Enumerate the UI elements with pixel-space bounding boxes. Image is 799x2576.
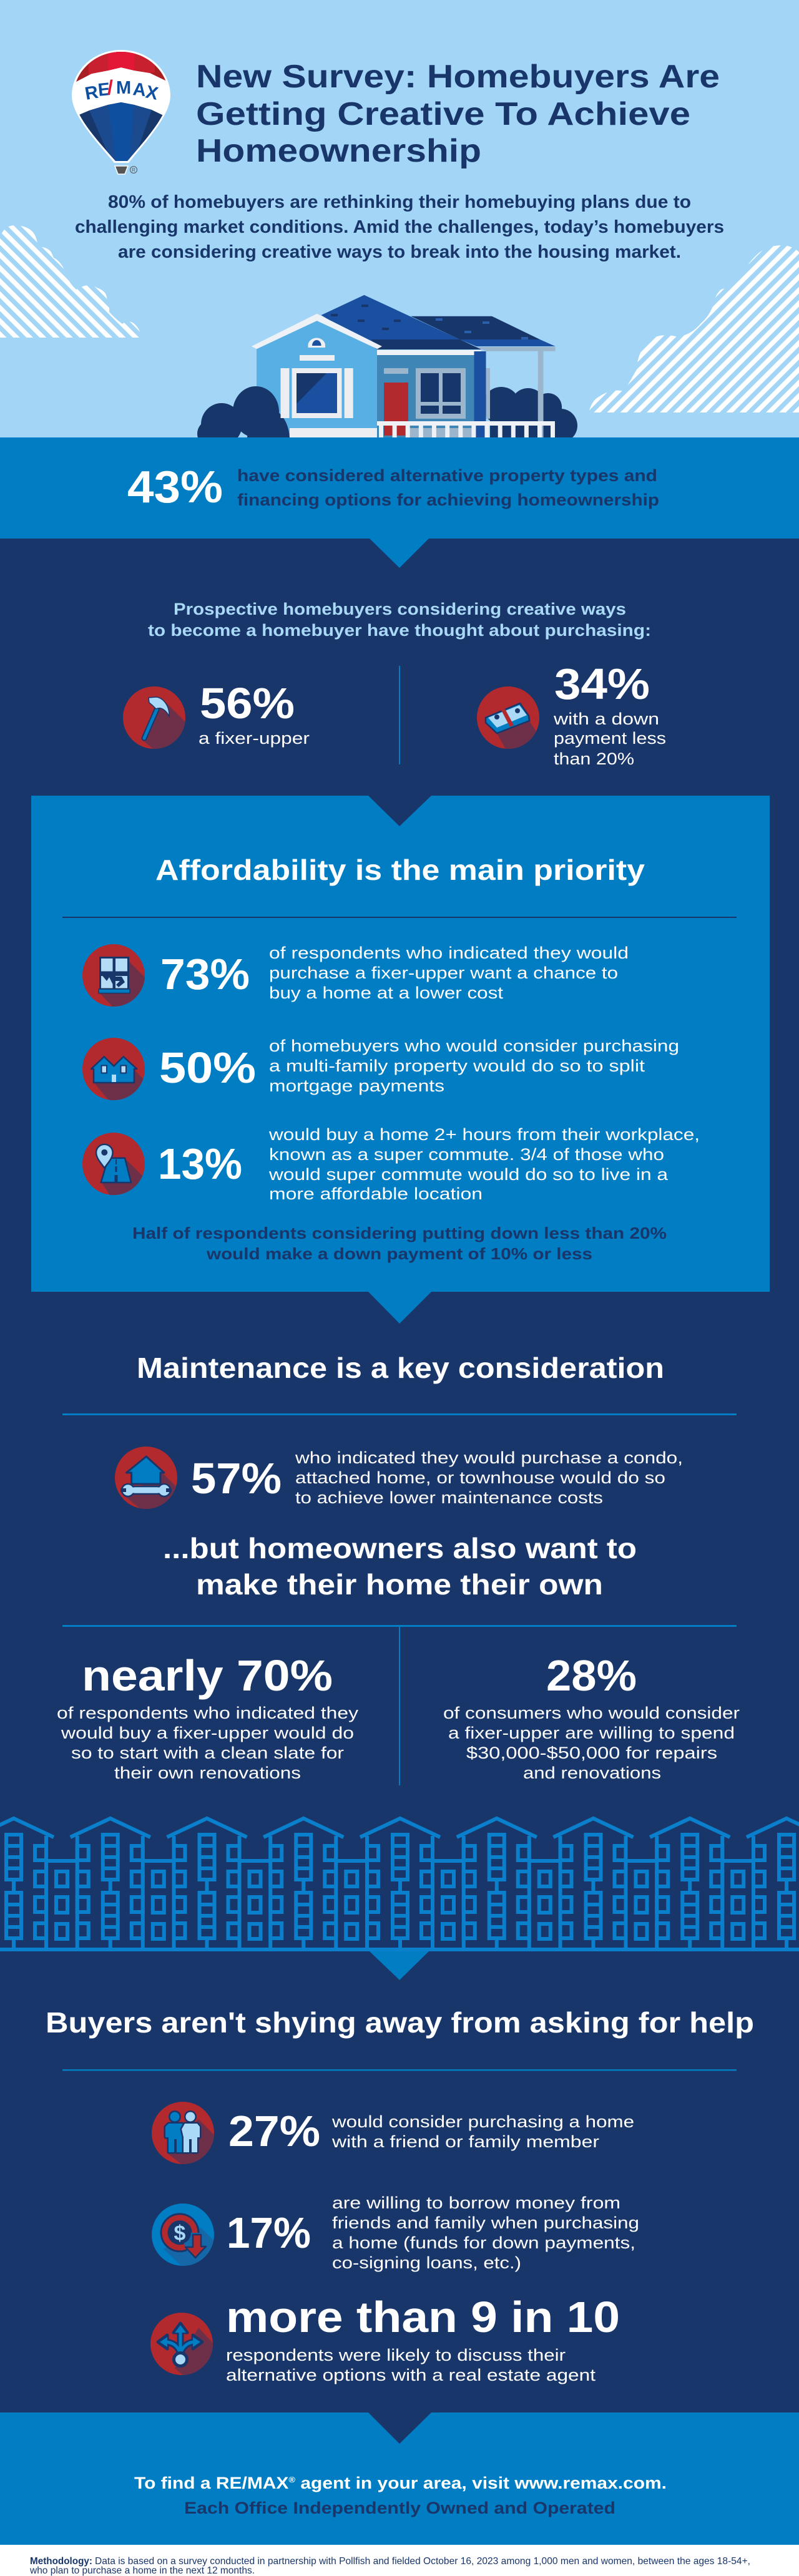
main roof — [321, 295, 481, 349]
stat: 13%: 13% — [158, 1139, 242, 1188]
icon: road with location pin — [82, 1133, 145, 1195]
heading: make their home their own: ...but homeowners also want to — [163, 1532, 637, 1564]
stat: 13%: would super commute would do so to live in a — [268, 1165, 669, 1184]
stat: 50%: a multi-family property would do so to split — [269, 1056, 645, 1075]
gable vent — [308, 338, 325, 348]
intro paragraph: are considering creative ways to break into the housing market. — [118, 242, 681, 262]
icon: broken window — [82, 944, 145, 1007]
callout: half of respondents: Half of respondents considering putting down less than 20% — [132, 1224, 667, 1242]
stat: 57%: who indicated they would purchase a condo, — [295, 1448, 683, 1467]
stat: nearly 70%: so to start with a clean slate for — [71, 1744, 344, 1762]
heading: prospective homebuyers: Prospective homebuyers considering creative ways — [174, 600, 626, 618]
gable fascia — [252, 314, 382, 349]
stat: more than 9 in 10: more than 9 in 10 — [226, 2293, 620, 2341]
stat: nearly 70%: of respondents who indicated they — [57, 1704, 359, 1722]
main wall — [257, 321, 377, 437]
stat: 34% low down payment: than 20% — [554, 749, 634, 768]
arrow: down pointer from 43% band — [370, 539, 429, 568]
logo wordmark: M — [116, 78, 131, 98]
stat: 43%: financing options for achieving homeownership — [237, 490, 659, 509]
stat: more than 9 in 10 — [226, 2293, 620, 2384]
icon: house with wrench — [115, 1447, 177, 1509]
stat: 43%: have considered alternative property types and — [237, 466, 657, 485]
methodology note — [29, 2556, 750, 2576]
stat: 28%: of consumers who would consider — [443, 1704, 740, 1722]
heading: make their home their own — [163, 1532, 637, 1601]
icon: money with down arrow: $ — [174, 2222, 186, 2245]
divider with vertical split — [62, 1625, 737, 1785]
stat: 57%: attached home, or townhouse would do so — [295, 1468, 665, 1487]
logo: RE/MAX balloon: R — [132, 167, 135, 173]
porch post and railing — [408, 428, 474, 437]
stat: 17%: a home (funds for down payments, — [332, 2233, 635, 2252]
divider — [62, 1413, 737, 1415]
stat: 27% — [228, 2107, 634, 2155]
title: Homeownership — [196, 133, 481, 169]
stat: nearly 70%: nearly 70% — [82, 1651, 333, 1700]
stat: 50%: mortgage payments — [269, 1076, 444, 1095]
cloud: left striped cloud — [0, 225, 142, 338]
callout: half of respondents — [132, 1224, 667, 1263]
stat: 34% low down payment: 34% — [554, 660, 650, 708]
stat: 27%: with a friend or family member — [331, 2132, 599, 2151]
heading: prospective homebuyers — [148, 600, 651, 640]
icon: branching arrows — [150, 2313, 213, 2375]
stat: 73% — [160, 944, 629, 1002]
stat: 73%: purchase a fixer-upper want a chance to — [269, 964, 618, 982]
stat: 73%: buy a home at a lower cost — [269, 983, 504, 1002]
heading: maintenance: Maintenance is a key consideration — [137, 1352, 664, 1384]
intro paragraph: challenging market conditions. Amid the challenges, today’s homebuyers — [75, 217, 724, 237]
icon: money with down arrow — [152, 2203, 216, 2269]
stat: 27%: would consider purchasing a home — [331, 2112, 634, 2131]
intro paragraph: 80% of homebuyers are rethinking their homebuying plans due to — [108, 192, 691, 212]
porch wall — [377, 354, 474, 437]
red door — [384, 383, 408, 436]
intro paragraph — [75, 192, 724, 262]
title: Getting Creative To Achieve — [196, 96, 690, 132]
stat: 56% fixer-upper: a fixer-upper — [199, 729, 310, 748]
callout: half of respondents: would make a down payment of 10% or less — [206, 1244, 592, 1263]
panel: navy main background — [0, 539, 799, 2413]
illustration: row of townhouses — [0, 1818, 799, 1951]
stat: nearly 70%: their own renovations — [114, 1764, 301, 1782]
logo wordmark: X — [144, 82, 160, 104]
logo: RE/MAX balloon — [69, 49, 175, 174]
stat: 73%: of respondents who indicated they would — [269, 944, 629, 962]
stat: nearly 70%: would buy a fixer-upper would do — [61, 1724, 354, 1742]
arrow: down pointer from affordability panel — [368, 1292, 431, 1324]
stat: more than 9 in 10: respondents were likely to discuss their — [226, 2346, 566, 2364]
call to action text: Each Office Independently Owned and Operated — [184, 2499, 615, 2517]
front window — [281, 368, 290, 418]
stat: 56% fixer-upper: 56% — [200, 679, 295, 728]
logo wordmark: A — [132, 79, 147, 100]
call to action text: ® — [288, 2475, 296, 2484]
icon: duplex houses — [82, 1038, 145, 1100]
stat: 50%: 50% — [159, 1043, 256, 1092]
stat: more than 9 in 10: alternative options with a real estate agent — [226, 2366, 596, 2384]
stat: 13%: would buy a home 2+ hours from their workplace, — [268, 1125, 700, 1144]
stat: 57% — [191, 1448, 683, 1507]
stat: 43%: 43% — [127, 462, 223, 512]
stat: 34% low down payment: payment less — [554, 729, 666, 748]
icon: two people — [152, 2102, 216, 2167]
illustration: house with bushes — [197, 295, 577, 471]
stat: 17% — [227, 2193, 639, 2272]
divider — [62, 917, 737, 918]
title: New Survey: Homebuyers Are — [196, 59, 720, 95]
stat: 17%: co-signing loans, etc.) — [332, 2253, 521, 2272]
icon: stack of money — [477, 686, 539, 749]
stat: 28%: a fixer-upper are willing to spend — [448, 1724, 735, 1742]
left bushes — [197, 386, 290, 471]
call to action text: agent in your area, visit www.remax.com. — [295, 2474, 667, 2492]
logo wordmark: / — [107, 76, 113, 99]
divider — [62, 2069, 737, 2071]
panel: 43% band — [0, 437, 799, 539]
stat: 27%: 27% — [228, 2107, 320, 2155]
stat: 34% low down payment: with a down — [553, 710, 659, 728]
panel: affordability — [31, 796, 770, 1292]
heading: affordability: Affordability is the main priority — [155, 854, 645, 886]
stat: 13%: more affordable location — [269, 1184, 483, 1203]
panel: sky header background — [0, 0, 799, 438]
stat: 57%: to achieve lower maintenance costs — [295, 1488, 603, 1507]
stat: 57%: 57% — [191, 1454, 282, 1503]
stat: 17%: 17% — [227, 2208, 311, 2257]
stat: 28% — [443, 1651, 740, 1782]
arrow: navy notch into affordability panel — [368, 796, 431, 826]
stat: 28%: and renovations — [523, 1764, 661, 1782]
cloud: right striped cloud — [589, 245, 799, 412]
stat: 13% — [158, 1125, 700, 1203]
title — [196, 59, 720, 169]
arrow: navy pointer into footer — [368, 2413, 431, 2444]
porch window — [416, 368, 466, 419]
stat: 17%: are willing to borrow money from — [332, 2193, 620, 2212]
logo wordmark: R — [84, 82, 100, 104]
call to action text: To find a RE/MAX — [134, 2474, 273, 2492]
stat: 34% low down payment — [553, 660, 666, 768]
heading: prospective homebuyers: to become a homebuyer have thought about purchasing: — [148, 621, 651, 640]
stat: 13%: known as a super commute. 3/4 of those who — [269, 1145, 664, 1164]
methodology note: Data is based on a survey conducted in partnership with Pollfish and fielded October 16, 2023 among 1,000 men and women, between the ages 18-54+, — [95, 2556, 750, 2567]
stat: 50%: of homebuyers who would consider purchasing — [269, 1037, 679, 1055]
stat: 50% — [159, 1037, 679, 1095]
stat: 28%: $30,000-$50,000 for repairs — [466, 1744, 717, 1762]
right bushes — [483, 387, 577, 442]
icon: hammer — [123, 686, 187, 751]
arrow: down pointer from townhouses — [370, 1951, 429, 1980]
stat: 43% — [127, 462, 659, 512]
heading: asking for help: Buyers aren't shying away from asking for help — [46, 2006, 754, 2039]
stat: nearly 70% — [57, 1651, 359, 1782]
divider: purchase options — [399, 666, 400, 764]
stat: 28%: 28% — [546, 1651, 637, 1700]
stat: 73%: 73% — [160, 950, 250, 998]
logo wordmark: E — [97, 79, 111, 100]
heading: make their home their own: make their home their own — [196, 1568, 603, 1601]
stat: 56% fixer-upper — [199, 679, 310, 748]
methodology note: Methodology: — [30, 2556, 92, 2567]
panel: methodology strip — [0, 2545, 799, 2576]
methodology note: who plan to purchase a home in the next 12 months. — [29, 2565, 255, 2576]
call to action text — [134, 2474, 667, 2517]
panel: footer call to action — [0, 2413, 799, 2545]
stat: 17%: friends and family when purchasing — [332, 2213, 639, 2232]
